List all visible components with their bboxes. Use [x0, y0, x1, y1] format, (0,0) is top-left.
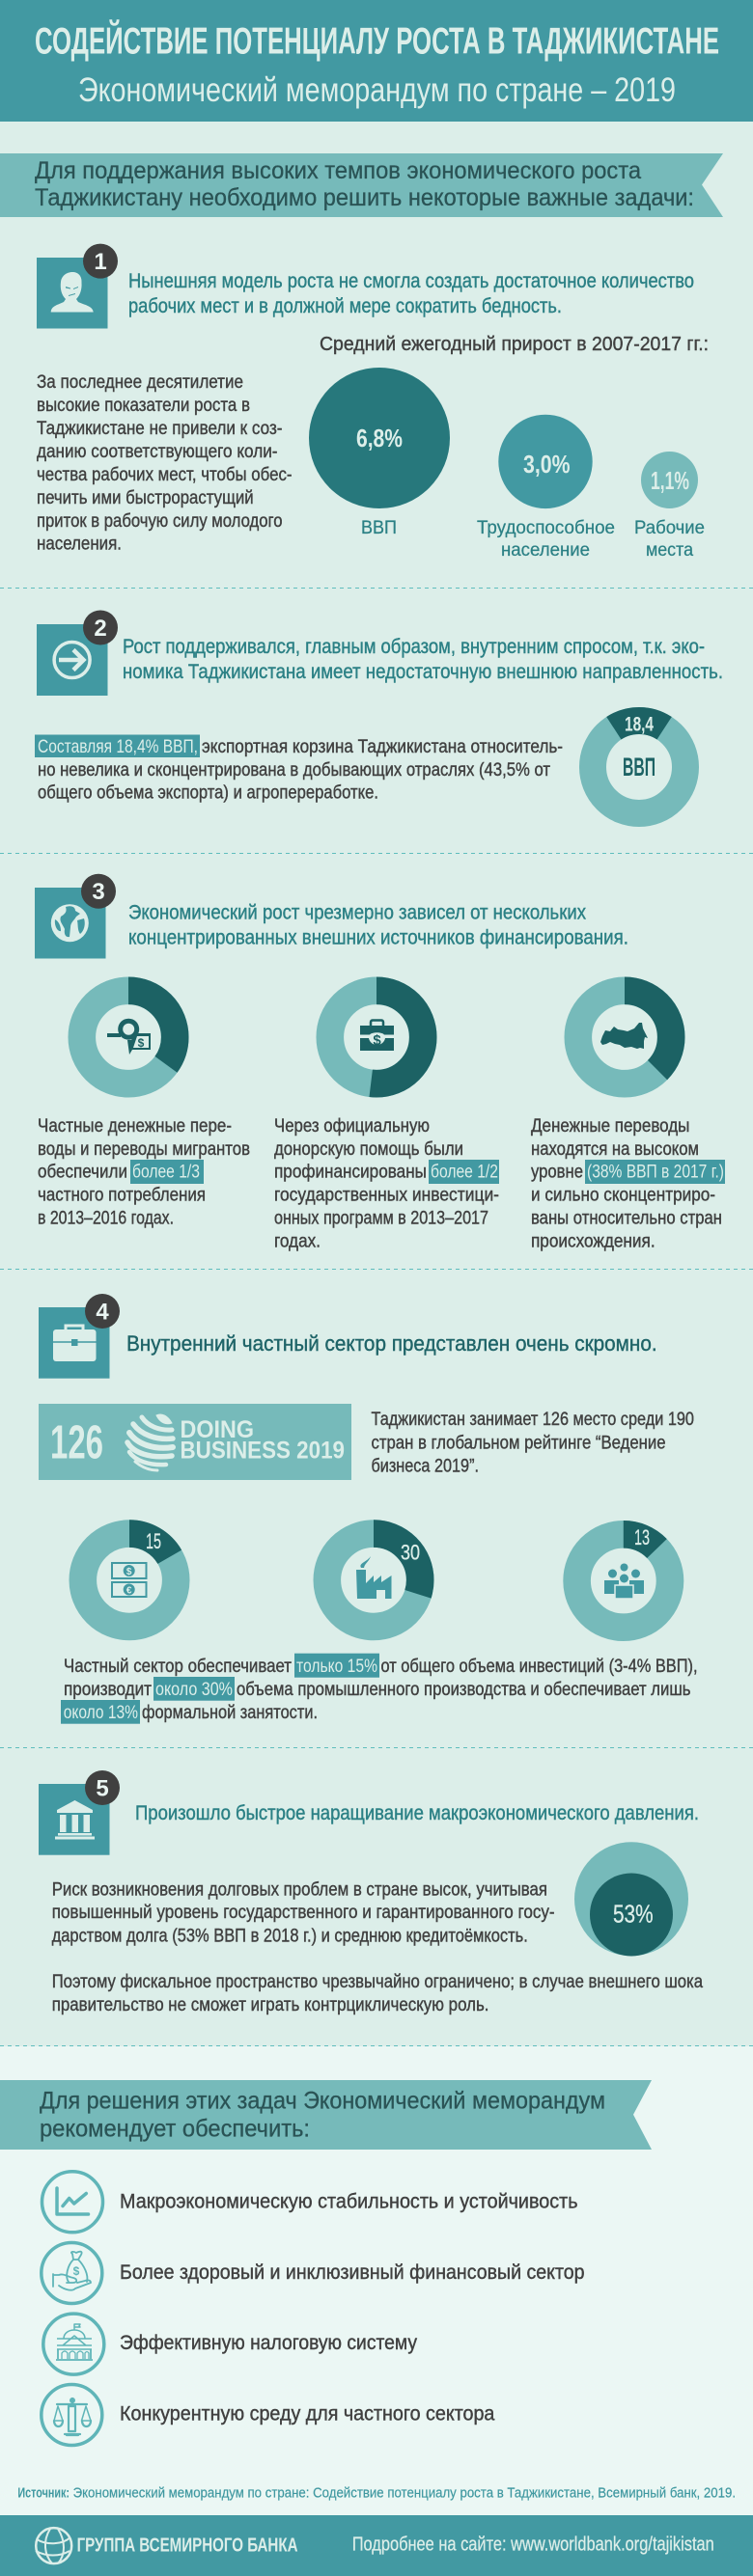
recommendation 1: Макроэкономическую стабильность и устойчивость — [120, 2191, 578, 2213]
chart: exports donut: ВВП — [623, 753, 655, 781]
chart: employment donut 13: 13 — [634, 1525, 650, 1549]
chart: official aid donut — [330, 991, 423, 1083]
text block: ranking note — [371, 1409, 694, 1477]
icon: banknotes — [111, 1562, 147, 1598]
text block: export basket — [35, 735, 563, 804]
panel: doing business ranking — [39, 1404, 351, 1480]
chart: exports donut — [575, 703, 703, 831]
icon: money transfer pin: $ — [138, 1036, 145, 1050]
panel: section 2 — [35, 610, 723, 831]
text block: fiscal space: правительство не сможет играть контрциклическую роль. — [52, 1994, 488, 2015]
icon: banknotes: $ — [126, 1567, 132, 1577]
icon: bank with badge 5 — [39, 1770, 120, 1855]
panel: doing business ranking: DOING — [180, 1416, 254, 1443]
text block: remittances: частного потребления — [38, 1185, 206, 1206]
text block: decade summary: Таджикистане не привели к соз- — [37, 418, 282, 439]
text block: remittance level: происхождения. — [531, 1230, 655, 1251]
chart: growth bubbles: 6,8% — [356, 424, 403, 452]
text block: debt risk — [52, 1878, 555, 1946]
icon: stability chart — [42, 2172, 102, 2233]
icon: briefcase with dollar: $ — [373, 1032, 381, 1049]
text block: decade summary: данию соответствующего коли- — [37, 441, 278, 462]
text block: debt risk: дарством долга (53% ВВП в 2018 г.) и среднюю кредитоёмкость. — [52, 1925, 528, 1946]
icon: money bag on hand: $ — [73, 2264, 80, 2278]
text block: remittances: воды и переводы мигрантов — [38, 1138, 250, 1160]
panel: section 4 — [39, 1294, 697, 1724]
text block: private sector shares: объема промышленного производства и обеспечивает лишь — [237, 1679, 690, 1700]
text block: remittance level: и сильно сконцентриро- — [531, 1185, 715, 1206]
chart: industry donut 30: 30 — [401, 1541, 420, 1565]
panel: section 5 — [39, 1770, 703, 2015]
chart: growth bubbles: 1,1% — [651, 466, 689, 495]
text block: official aid: годах. — [274, 1230, 321, 1251]
text block: decade summary: приток в рабочую силу молодого — [37, 510, 283, 532]
text block: official aid: онных программ в 2013–2017 — [274, 1208, 488, 1229]
text block: private sector shares: от общего объема инвестиций (3-4% ВВП), — [380, 1656, 697, 1677]
chart: investment donut 15 — [83, 1529, 176, 1627]
ribbon: recommendations: Для решения этих задач Экономический меморандум — [40, 2088, 605, 2115]
text block: debt risk: повышенный уровень государственного и гарантированного госу- — [52, 1902, 555, 1923]
text block: official aid: профинансированы — [274, 1162, 427, 1183]
icon: banknotes: € — [126, 1586, 132, 1596]
ribbon: recommendations — [0, 2080, 652, 2150]
text block: export basket: Составляя 18,4% ВВП, — [38, 736, 198, 757]
heading 3: Экономический рост чрезмерно зависел от нескольких — [128, 901, 586, 924]
chart: exports donut: 18,4 — [625, 714, 654, 735]
heading 1 — [128, 270, 694, 317]
chart title: Средний ежегодный прирост в 2007-2017 гг.: — [320, 334, 709, 355]
recommendation 4: Конкурентную среду для частного сектора — [120, 2402, 495, 2425]
text block: private sector shares: формальной занятости. — [142, 1702, 318, 1723]
icon: globe with badge 3: 3 — [92, 879, 105, 905]
ribbon: important tasks intro: Для поддержания высоких темпов экономического роста — [35, 157, 641, 184]
source note: Источник: — [17, 2485, 70, 2502]
icon: globe with badge 3 — [35, 874, 116, 959]
text block: decade summary: высокие показатели роста в — [37, 395, 250, 416]
footer: ГРУППА ВСЕМИРНОГО БАНКА — [77, 2535, 297, 2556]
text block: decade summary — [37, 371, 292, 554]
ribbon: important tasks intro — [0, 153, 723, 217]
text block: remittance level: уровне — [531, 1162, 583, 1183]
panel: section 1 — [37, 244, 709, 561]
text block: private sector shares: Частный сектор обеспечивает — [64, 1656, 292, 1677]
ribbon: important tasks intro: Таджикистану необходимо решить некоторые важные задачи: — [35, 184, 694, 211]
chart: origin countries donut — [578, 991, 671, 1083]
text block: official aid: Через официальную — [274, 1115, 430, 1137]
icon: map of Russia — [600, 1023, 648, 1049]
icon: person with badge 1: 1 — [94, 249, 107, 275]
text block: export basket: но невелика и сконцентрирована в добывающих отраслях (43,5% от — [38, 759, 550, 781]
text block: fiscal space — [52, 1971, 703, 2015]
icon: government building — [43, 2314, 104, 2374]
icon: person with badge 1 — [37, 244, 118, 328]
text block: debt risk: Риск возникновения долговых проблем в стране высок, учитывая — [52, 1878, 547, 1900]
text block: remittance level: находятся на высоком — [531, 1138, 699, 1160]
chart: debt bubble — [574, 1842, 688, 1957]
text block: decade summary: За последнее десятилетие — [37, 371, 243, 393]
icon: briefcase with badge 4 — [39, 1294, 120, 1379]
text block: private sector shares: производит — [64, 1679, 152, 1700]
panel: section 3 — [35, 874, 725, 1251]
footer — [0, 2515, 753, 2576]
text block: remittances: в 2013–2016 годах. — [38, 1208, 174, 1229]
text block: remittances: Частные денежные пере- — [38, 1115, 232, 1137]
text block: private sector shares — [61, 1654, 697, 1724]
text block: remittance level: Денежные переводы — [531, 1115, 689, 1137]
icon: arrow with badge 2: 2 — [94, 616, 107, 642]
text block: decade summary: чества рабочих мест, чтобы обес- — [37, 464, 292, 485]
chart: growth bubbles: 3,0% — [523, 450, 570, 479]
chart: growth bubbles: ВВП — [361, 517, 397, 538]
ribbon: recommendations: рекомендует обеспечить: — [40, 2115, 310, 2142]
text block: remittances: более 1/3 — [132, 1162, 200, 1183]
text block: official aid: государственных инвестици- — [274, 1185, 499, 1206]
text block: decade summary: печить ими быстрорастущий — [37, 487, 254, 508]
heading 3 — [128, 901, 628, 948]
icon: scales — [42, 2385, 102, 2445]
chart: growth bubbles: население — [501, 539, 590, 561]
icon: people — [604, 1563, 644, 1599]
icon: doing business globe — [127, 1414, 173, 1470]
panel: doing business ranking: BUSINESS 2019 — [180, 1438, 345, 1465]
chart: growth bubbles: Трудоспособное — [477, 517, 615, 538]
chart: growth bubbles — [309, 368, 705, 561]
text block: decade summary: населения. — [37, 533, 122, 554]
panel: doing business ranking: 126 — [50, 1417, 103, 1469]
recommendation 2: Более здоровый и инклюзивный финансовый сектор — [120, 2261, 585, 2284]
heading 3: концентрированных внешних источников финансирования. — [128, 926, 628, 948]
icon: bank with badge 5: 5 — [96, 1775, 109, 1802]
heading 4: Внутренний частный сектор представлен очень скромно. — [126, 1331, 657, 1356]
chart: growth bubbles: Рабочие — [634, 517, 705, 538]
chart: growth bubbles: места — [646, 539, 693, 561]
icon: world bank globe — [36, 2528, 71, 2563]
text block: remittance level: ваны относительно стран — [531, 1208, 722, 1229]
text block: remittances — [38, 1115, 250, 1229]
text block: remittances: обеспечили — [38, 1162, 127, 1183]
text block: official aid: более 1/2 — [431, 1162, 498, 1183]
text block: official aid: донорскую помощь были — [274, 1138, 463, 1160]
text block: export basket: экспортная корзина Таджикистана относитель- — [202, 736, 563, 757]
text block: private sector shares: около 13% — [64, 1702, 138, 1723]
heading 1: рабочих мест и в должной мере сократить бедность. — [128, 295, 562, 317]
text block: ranking note: стран в глобальном рейтинге “Ведение — [371, 1433, 666, 1454]
text block: export basket: общего объема экспорта) и агропереработке. — [38, 782, 378, 804]
panel: recommendations list — [42, 2172, 585, 2445]
icon: arrow with badge 2 — [37, 610, 118, 696]
text block: private sector shares: около 30% — [155, 1679, 233, 1700]
chart: industry donut 30 — [327, 1534, 420, 1627]
chart: debt bubble: 53% — [613, 1900, 654, 1929]
icon: money bag on hand — [42, 2242, 102, 2304]
icon: factory — [356, 1556, 392, 1599]
header banner — [0, 0, 753, 122]
text block: ranking note: Таджикистан занимает 126 место среди 190 — [371, 1409, 694, 1430]
chart: remittances donut — [82, 991, 175, 1083]
icon: briefcase with badge 4: 4 — [96, 1299, 109, 1326]
text block: ranking note: бизнеса 2019”. — [371, 1456, 479, 1477]
heading 2 — [123, 636, 723, 683]
chart: employment donut 13 — [577, 1525, 670, 1628]
recommendation 3: Эффективную налоговую систему — [120, 2332, 417, 2354]
text block: remittance level — [531, 1115, 725, 1251]
chart: investment donut 15: 15 — [146, 1529, 161, 1553]
text block: official aid — [274, 1115, 499, 1251]
text block: private sector shares: только 15% — [296, 1656, 377, 1677]
